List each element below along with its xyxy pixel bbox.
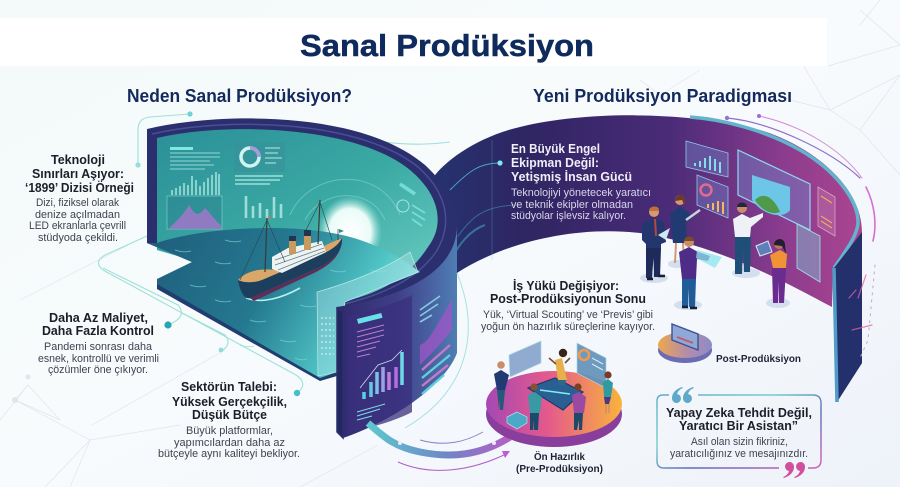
label: post-prodüksiyon: Post-Prodüksiyon [716,354,801,365]
pre-production screens [509,341,541,377]
text: maliyet: Pandemi sonrası daha [44,341,152,353]
front curved panel [337,227,457,438]
pre-production table [528,378,583,410]
team figures [640,195,790,310]
icon: closing quote mark [783,462,805,478]
text: en büyük engel: Yetişmiş İnsan Gücü [511,169,632,184]
section heading left: Neden Sanal Prodüksiyon? [127,86,352,106]
mesh nodes [12,374,30,403]
stream dots [398,441,496,445]
label: ön hazırlık: Ön Hazırlık [534,450,585,463]
quote text [666,405,812,460]
text: maliyet: esnek, kontrollü ve verimli [38,353,159,365]
text: iş yükü [481,278,655,333]
post-production monitor [672,324,698,350]
person: man in white shirt [733,202,763,274]
label: ön hazırlık [516,450,603,475]
text: maliyet: Daha Fazla Kontrol [42,323,154,338]
text: en büyük engel: stüdyolar işlevsiz kalıyor. [511,210,626,222]
frame inner accent [152,124,446,306]
text: maliyet: Daha Az Maliyet, [49,310,148,325]
pre-production platform [486,341,622,447]
panel inner screen [347,295,412,433]
text: iş yükü: Yük, ‘Virtual Scouting’ ve ‘Previs’ gibi [483,309,653,321]
translucent data overlay [317,252,418,376]
person: man in purple [679,236,722,308]
right curved wall [433,115,862,402]
text: maliyet: çözümler öne çıkıyor. [48,364,148,376]
section heading right: Yeni Prodüksiyon Paradigması [533,86,792,106]
text: teknoloji: Sınırları Aşıyor: [32,166,124,181]
text: teknoloji [25,152,134,244]
title band [0,18,827,66]
wall circuit lines [450,140,520,262]
text: teknoloji: Dizi, fiziksel olarak [36,197,120,209]
person: woman in orange [756,239,787,303]
LED screen frame left [147,118,458,309]
LED wall teal [157,129,438,303]
text: iş yükü: yoğun ön hazırlık süreçlerine kayıyor. [481,321,655,333]
text: sektörün talebi: Büyük platformlar, [186,425,273,437]
text: en büyük engel [511,141,651,222]
water waves [175,240,386,360]
flow stream to pre-production [368,273,510,470]
icon: opening quote mark [672,387,694,403]
text: sektörün talebi: Yüksek Gerçekçilik, [172,394,287,409]
text: en büyük engel: ve teknik ekipler olmadan [511,199,633,211]
text: sektörün talebi: Sektörün Talebi: [181,379,277,394]
wall top rim [690,117,858,268]
text: teknoloji: denize açılmadan [35,209,120,221]
text: sektörün talebi: yapımcılardan daha az [174,437,285,449]
text: iş yükü: Post-Prodüksiyonun Sonu [490,291,646,306]
text: teknoloji: Teknoloji [51,152,105,167]
text: en büyük engel: Teknolojiyi yönetecek yaratıcı [511,187,651,199]
text: en büyük engel: Ekipman Değil: [511,155,599,170]
pre-production cube [507,412,527,429]
quote text: Yapay Zeka Tehdit Değil, [666,405,812,420]
title band: Sanal Prodüksiyon [300,28,594,63]
wall cap edge [834,268,837,402]
text: en büyük engel: En Büyük Engel [511,141,600,156]
text: iş yükü: İş Yükü Değişiyor: [513,278,619,293]
text: teknoloji: LED ekranlarla çevrill [29,220,126,232]
person: man with tablet [642,206,670,279]
text: teknoloji: ‘1899’ Dizisi Örneği [25,180,134,195]
quote text: Yaratıcı Bir Asistan” [679,418,798,433]
post-production disc [658,324,712,363]
text: sektörün talebi [158,379,300,460]
text: teknoloji: stüdyoda çekildi. [38,232,118,244]
decorative arcs right [727,116,875,358]
ship [238,200,344,301]
arc end dots [725,114,761,120]
quote callout [657,387,821,478]
person: woman in navy dress [670,195,700,263]
wall dot [497,160,503,166]
screen charts [166,146,426,246]
floor water [147,228,420,381]
wall end cap [834,232,862,402]
leader lines left [98,114,450,393]
pre-production team [494,349,613,430]
wall holographic panels [686,141,835,282]
quote text: Asıl olan sizin fikriniz, [691,436,788,448]
quote text: yaratıcılığınız ve mesajınızdır. [670,448,808,460]
label: ön hazırlık: (Pre-Prodüksiyon) [516,464,603,475]
text: maliyet [38,310,159,376]
text: sektörün talebi: Düşük Bütçe [192,407,267,422]
text: sektörün talebi: bütçeyle aynı kaliteyi bekliyor. [158,448,300,460]
leader dots left [135,111,300,396]
panel left edge [337,308,343,438]
